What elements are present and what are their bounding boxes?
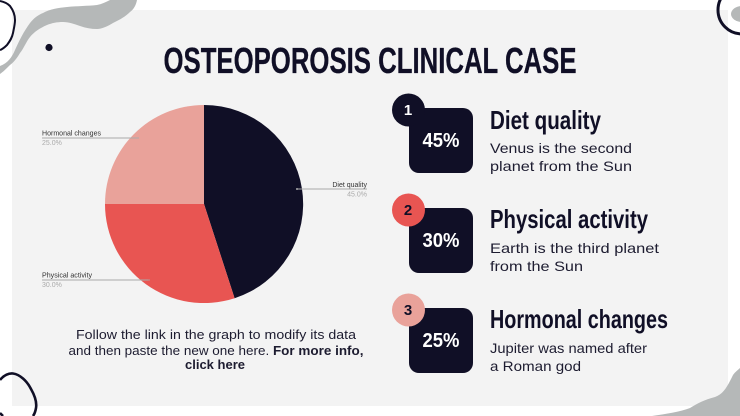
heading: Hormonal changes bbox=[490, 304, 668, 334]
value box 45% bbox=[409, 108, 473, 173]
decoration: grey wave top left bbox=[0, 0, 137, 74]
decoration: grey shape bottom right bbox=[652, 368, 740, 416]
caption: Follow the link in the graph to modify its data bbox=[76, 327, 357, 342]
chart label: hormonal changes: Hormonal changes bbox=[42, 130, 101, 138]
caption: click here bbox=[185, 357, 245, 372]
item 2: physical activity: 2 bbox=[404, 202, 412, 219]
heading: Diet quality bbox=[490, 105, 601, 135]
chart label: hormonal changes bbox=[42, 130, 139, 147]
number badge 3 bbox=[392, 294, 425, 326]
decoration: outline blob top left bbox=[0, 1, 15, 50]
value box 25% bbox=[409, 308, 473, 373]
caption: and then paste the new one here. For more info, bbox=[68, 343, 364, 358]
title: OSTEOPOROSIS CLINICAL CASE bbox=[164, 40, 576, 81]
caption bbox=[68, 327, 364, 372]
item 3: hormonal changes bbox=[392, 294, 668, 374]
item 2: physical activity: 30% bbox=[422, 230, 460, 252]
item 1: diet quality: 1 bbox=[404, 102, 412, 119]
chart label: diet quality: 45.0% bbox=[347, 192, 367, 198]
decoration: outline circle bottom left bbox=[0, 373, 36, 416]
heading: Physical activity bbox=[490, 204, 648, 234]
chart label: diet quality bbox=[296, 182, 367, 198]
chart label: hormonal changes: 25.0% bbox=[42, 140, 62, 147]
item 1: diet quality: 45% bbox=[422, 130, 460, 152]
item 2: physical activity bbox=[392, 194, 659, 274]
description: Earth is the third planet bbox=[490, 240, 659, 256]
item 3: hormonal changes: 3 bbox=[404, 302, 412, 319]
slice: physical activity 30% bbox=[105, 204, 235, 303]
chart label: physical activity bbox=[42, 272, 150, 289]
description: Venus is the second bbox=[490, 140, 632, 156]
description: Jupiter was named after bbox=[490, 340, 647, 356]
chart label: physical activity: 30.0% bbox=[42, 282, 62, 289]
pie chart bbox=[105, 105, 303, 303]
number badge 2 bbox=[392, 194, 425, 226]
decoration: dot bbox=[45, 44, 53, 51]
chart label: physical activity: Physical activity bbox=[42, 272, 93, 280]
item 1: diet quality bbox=[392, 94, 632, 174]
item 2: physical activity: from the Sun bbox=[490, 258, 583, 274]
slice: hormonal changes 25% bbox=[105, 105, 204, 204]
item 3: hormonal changes: a Roman god bbox=[490, 358, 581, 374]
number badge 1 bbox=[392, 94, 425, 126]
item 3: hormonal changes: 25% bbox=[422, 330, 460, 352]
chart label: diet quality: Diet quality bbox=[332, 182, 367, 189]
decoration: circle top right bbox=[718, 0, 740, 34]
item 1: diet quality: planet from the Sun bbox=[490, 158, 632, 174]
slice: diet quality 45% bbox=[204, 105, 303, 298]
value box 30% bbox=[409, 208, 473, 273]
